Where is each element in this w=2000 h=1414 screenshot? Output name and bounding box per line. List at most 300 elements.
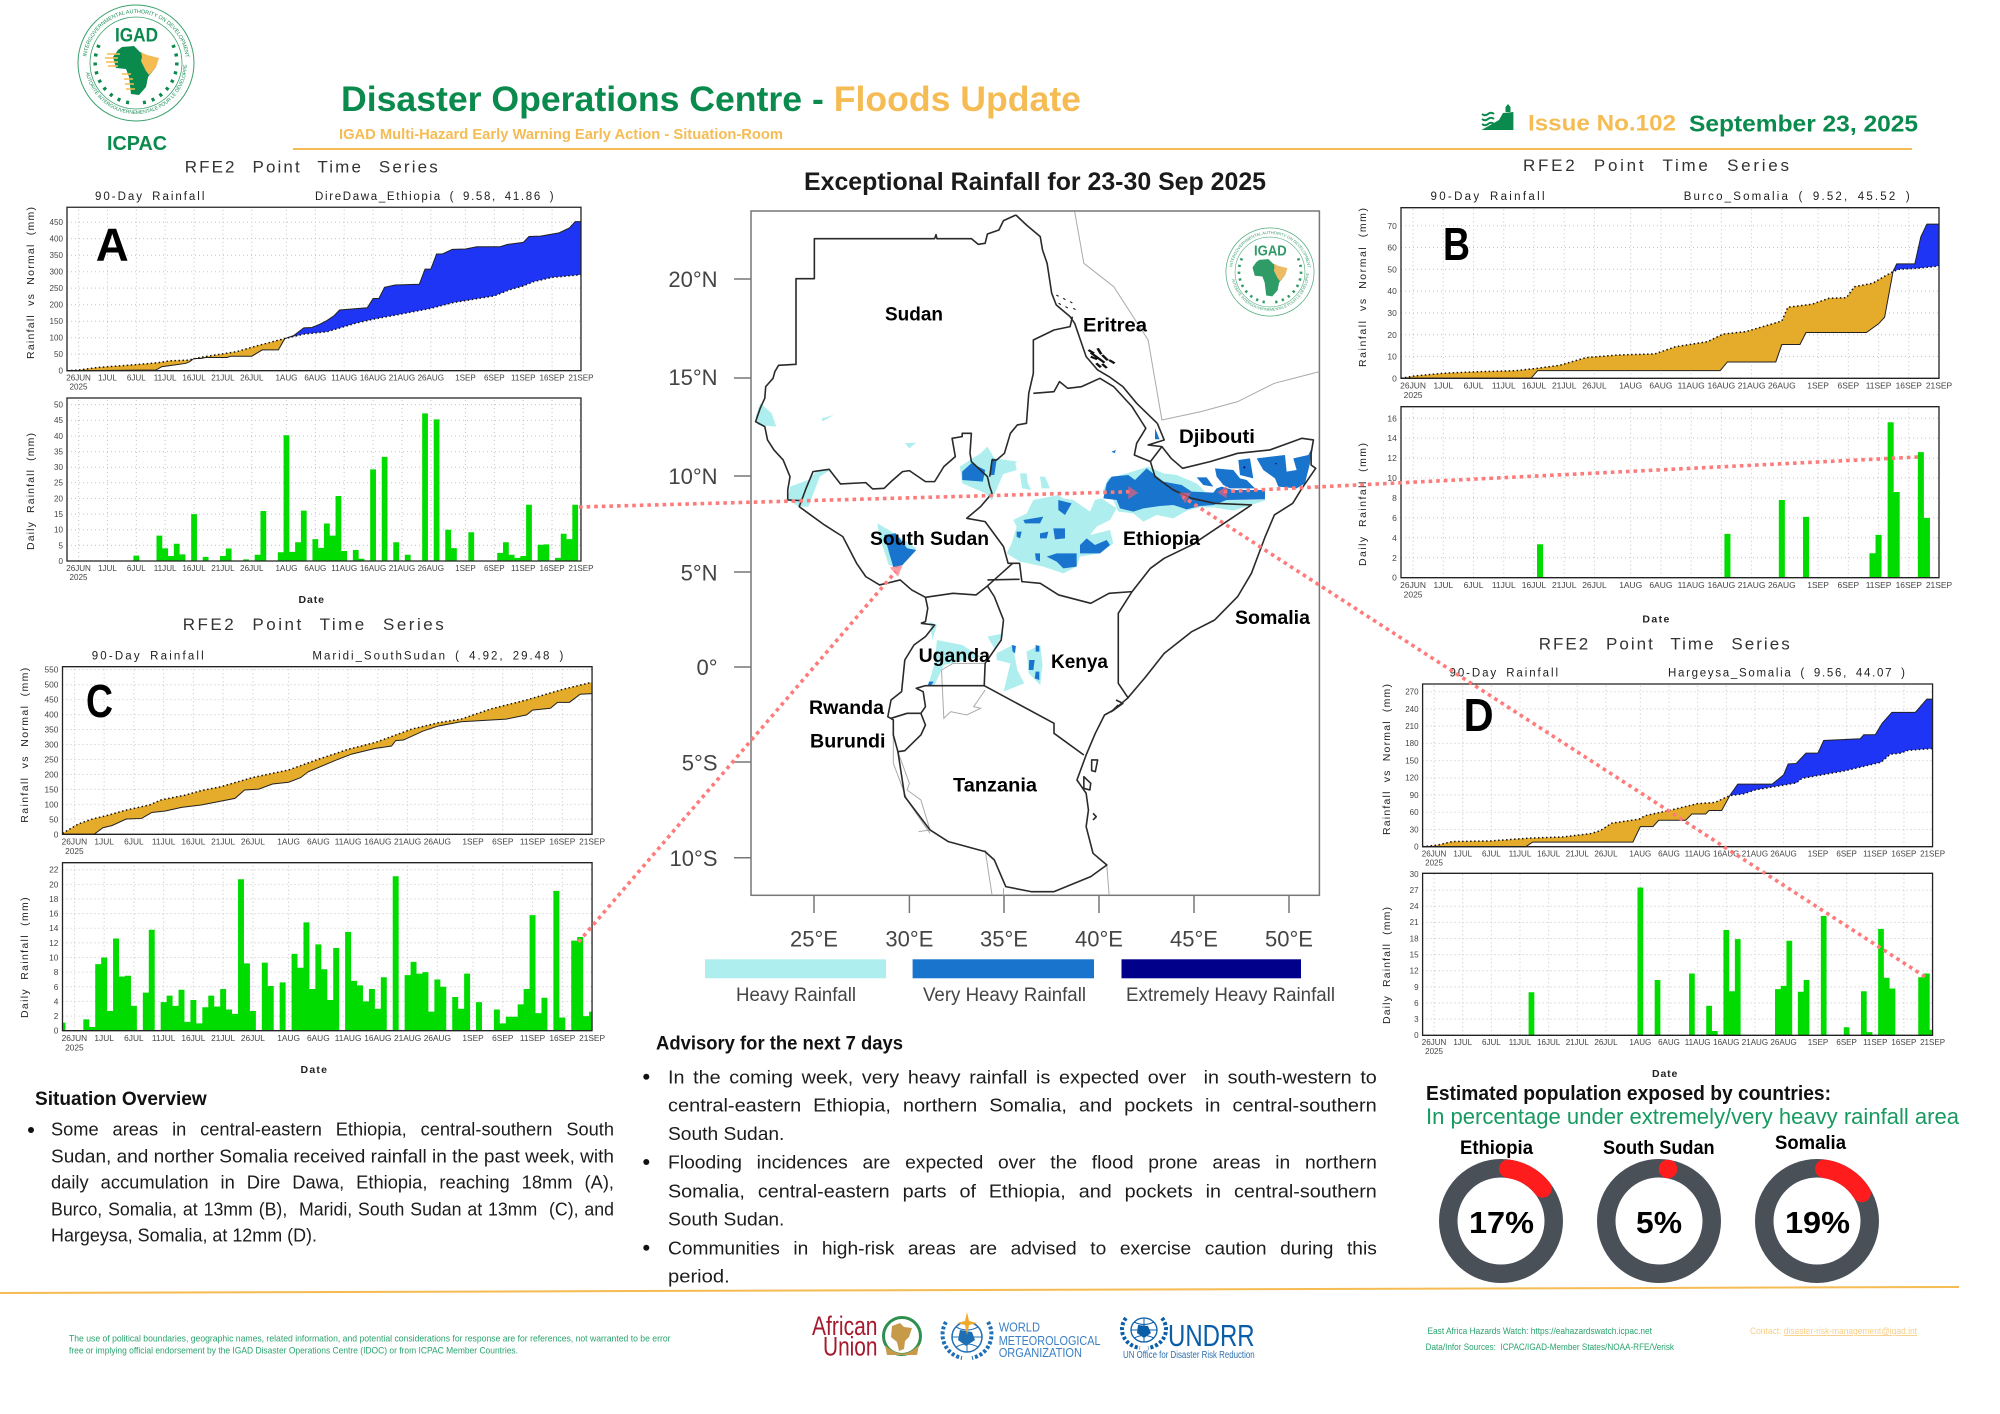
bar chart: daily rainfall: 26JUN bbox=[66, 564, 91, 573]
bar chart: daily rainfall: 6 bbox=[1392, 513, 1397, 523]
donut: South Sudan 5% bbox=[1603, 1137, 1715, 1274]
bar chart: daily rainfall: 4 bbox=[54, 996, 59, 1006]
bar chart: daily rainfall: 1AUG bbox=[277, 1033, 300, 1043]
area chart: rainfall vs normal: 16AUG bbox=[364, 836, 392, 846]
area chart: rainfall vs normal: 26JUL bbox=[1594, 849, 1618, 858]
area chart: rainfall vs normal: 6SEP bbox=[484, 374, 505, 383]
bar chart: daily rainfall: 12 bbox=[49, 938, 59, 948]
bar chart: daily rainfall: 21SEP bbox=[1920, 1038, 1945, 1047]
area chart: rainfall vs normal: 26JUN bbox=[62, 836, 87, 846]
bar chart: daily rainfall bbox=[54, 398, 594, 582]
bar chart: daily rainfall: 1SEP bbox=[455, 564, 476, 573]
bar chart: daily rainfall: 16AUG bbox=[360, 564, 386, 573]
area chart: rainfall vs normal: 11AUG bbox=[1685, 849, 1710, 858]
area chart: rainfall vs normal: 21JUL bbox=[1552, 381, 1577, 391]
disclaimer: The use of political boundaries, geographic names, related information, and potential considerations for response are for references, not warranted to be error bbox=[69, 1334, 670, 1344]
area chart: rainfall vs normal: 0 bbox=[1392, 373, 1397, 383]
chart title: RFE2 Point Time Series bbox=[185, 157, 438, 176]
area chart: rainfall vs normal: 1JUL bbox=[94, 836, 114, 846]
panel: chart A Dire Dawa bbox=[25, 157, 594, 606]
bar chart: daily rainfall: 16AUG bbox=[364, 1033, 392, 1043]
bar chart: daily rainfall: 21AUG bbox=[389, 564, 415, 573]
area chart: rainfall vs normal: 16AUG bbox=[360, 374, 386, 383]
bar chart: daily rainfall: 6AUG bbox=[1649, 580, 1672, 590]
bar chart: daily rainfall: 21JUL bbox=[1552, 580, 1577, 590]
bar chart: daily rainfall: 10 bbox=[1387, 473, 1397, 483]
axis label: Daily Rainfall (mm) bbox=[19, 897, 31, 1018]
area chart: rainfall vs normal: 400 bbox=[44, 710, 59, 720]
axis label: Daily Rainfall (mm) bbox=[25, 433, 37, 550]
area chart: rainfall vs normal: 26AUG bbox=[418, 374, 444, 383]
area chart: rainfall vs normal: 16SEP bbox=[1891, 849, 1916, 858]
area chart: rainfall vs normal: 1AUG bbox=[1619, 381, 1642, 391]
area chart: rainfall vs normal: 16JUL bbox=[181, 836, 206, 846]
bullet bbox=[28, 1127, 34, 1133]
bar chart: daily rainfall: 26AUG bbox=[1770, 1038, 1797, 1047]
area chart: rainfall vs normal: 2025 bbox=[1404, 390, 1423, 400]
date: September 23, 2025 bbox=[1689, 111, 1918, 137]
panel letter B: B bbox=[1443, 218, 1470, 270]
area chart: rainfall vs normal: 100 bbox=[44, 799, 59, 809]
area chart: rainfall vs normal: 2025 bbox=[65, 846, 84, 856]
bar chart: daily rainfall: 10 bbox=[49, 952, 59, 962]
bar chart: daily rainfall: 2 bbox=[54, 1011, 59, 1021]
bar chart: daily rainfall: 21AUG bbox=[394, 1033, 421, 1043]
bar chart: daily rainfall: 11AUG bbox=[1685, 1038, 1710, 1047]
body text: daily accumulation in Dire Dawa, Ethiopia, reaching 18mm (A), bbox=[51, 1172, 614, 1193]
legend: Extremely Heavy Rainfall bbox=[1126, 985, 1335, 1006]
area chart: rainfall vs normal: 30 bbox=[1387, 308, 1397, 318]
bar chart: daily rainfall: 20 bbox=[49, 879, 59, 889]
area chart: rainfall vs normal: 120 bbox=[1405, 774, 1419, 783]
area chart: rainfall vs normal: 240 bbox=[1405, 705, 1419, 714]
area chart: rainfall vs normal: 21SEP bbox=[1920, 849, 1945, 858]
logo: UNDRR bbox=[1122, 1318, 1255, 1361]
bar chart: daily rainfall: 11JUL bbox=[154, 564, 177, 573]
area chart: rainfall vs normal: 26JUL bbox=[240, 374, 264, 383]
text block: situation overview bbox=[28, 1089, 614, 1246]
longitude labels: 50°E bbox=[1265, 927, 1313, 952]
map logo: IGAD seal: INTERGOVERNMENTAL AUTHORITY ON DEVELOPMENT bbox=[1230, 231, 1311, 268]
logo: IGAD ICPAC seal: INTERGOVERNMENTAL AUTHORITY ON DEVELOPMENT bbox=[82, 9, 190, 58]
area chart: rainfall vs normal: 450 bbox=[49, 218, 63, 227]
area chart: rainfall vs normal: 210 bbox=[1405, 722, 1419, 731]
heading: Situation Overview bbox=[35, 1089, 207, 1110]
chart title: RFE2 Point Time Series bbox=[1539, 634, 1790, 653]
chart subtitle left: 90-Day Rainfall bbox=[95, 191, 204, 203]
country labels: Rwanda bbox=[809, 697, 884, 719]
body text: South Sudan. bbox=[668, 1208, 784, 1229]
logo caption: ICPAC: ICPAC bbox=[107, 133, 167, 155]
bar chart: daily rainfall: 30 bbox=[54, 463, 63, 472]
bar chart: daily rainfall: 6SEP bbox=[484, 564, 505, 573]
bar chart: daily rainfall: 11SEP bbox=[511, 564, 536, 573]
bar chart: daily rainfall: 1JUL bbox=[1433, 580, 1453, 590]
map title: Exceptional Rainfall for 23-30 Sep 2025 bbox=[804, 168, 1266, 196]
bar chart: daily rainfall: 11SEP bbox=[1863, 1038, 1887, 1047]
bar chart: daily rainfall: 1SEP bbox=[1808, 1038, 1828, 1047]
area chart: rainfall vs normal: 30 bbox=[1410, 825, 1419, 834]
area chart: rainfall vs normal: 100 bbox=[49, 334, 63, 343]
bar chart: daily rainfall: 1AUG bbox=[275, 564, 297, 573]
area chart: rainfall vs normal: 250 bbox=[44, 754, 59, 764]
area chart: rainfall vs normal: 16AUG bbox=[1708, 381, 1735, 391]
bar chart: daily rainfall: 50 bbox=[54, 401, 63, 410]
bar chart: daily rainfall: 6JUL bbox=[1482, 1038, 1501, 1047]
area chart: rainfall vs normal: 11AUG bbox=[331, 374, 357, 383]
logo: WMO: WORLD bbox=[999, 1320, 1040, 1335]
logo: African Union: African bbox=[812, 1311, 878, 1341]
area chart: rainfall vs normal: 21SEP bbox=[579, 836, 605, 846]
longitude labels: 25°E bbox=[790, 927, 838, 952]
area chart: rainfall vs normal: 150 bbox=[44, 784, 59, 794]
country labels: Sudan bbox=[885, 304, 943, 326]
area chart: rainfall vs normal: 11JUL bbox=[154, 374, 177, 383]
area chart: rainfall vs normal: 200 bbox=[44, 769, 59, 779]
bar chart: daily rainfall: 1SEP bbox=[462, 1033, 484, 1043]
area chart: rainfall vs normal: 1AUG bbox=[277, 836, 300, 846]
bar chart: daily rainfall: 18 bbox=[1410, 934, 1419, 943]
bar chart: daily rainfall: 1AUG bbox=[1619, 580, 1642, 590]
axis label: Daily Rainfall (mm) bbox=[1381, 907, 1393, 1024]
bar chart: daily rainfall: 21SEP bbox=[1926, 580, 1953, 590]
body text: Communities in high-risk areas are advised to exercise caution during this bbox=[668, 1237, 1377, 1258]
area chart: rainfall vs normal: 16JUL bbox=[1537, 849, 1561, 858]
donut: Somalia 19%: 19% bbox=[1785, 1205, 1850, 1240]
area chart: rainfall vs normal: 16AUG bbox=[1713, 849, 1739, 858]
map frame and axis ticks bbox=[734, 211, 1319, 913]
bar chart: daily rainfall: 26JUL bbox=[1594, 1038, 1618, 1047]
area chart: rainfall vs normal: 26JUL bbox=[241, 836, 265, 846]
bar chart: daily rainfall: 6AUG bbox=[307, 1033, 330, 1043]
bar chart: daily rainfall: 16AUG bbox=[1708, 580, 1735, 590]
area chart: rainfall vs normal: 450 bbox=[44, 695, 59, 705]
area chart: rainfall vs normal: 60 bbox=[1387, 243, 1397, 253]
logo: African Union bbox=[812, 1311, 920, 1362]
logo: WMO: ORGANIZATION bbox=[999, 1345, 1082, 1360]
area chart: rainfall vs normal: 270 bbox=[1405, 688, 1419, 697]
body text: Somalia, central-eastern parts of Ethiopia, and pockets in central-southern bbox=[668, 1180, 1377, 1201]
area chart: rainfall vs normal: 0 bbox=[54, 829, 59, 839]
bar chart: daily rainfall: 9 bbox=[1414, 983, 1419, 992]
map logo: IGAD seal: IGAD bbox=[1254, 244, 1287, 260]
bar chart: daily rainfall: 10 bbox=[54, 526, 63, 535]
axis label: Rainfall vs Normal (mm) bbox=[1357, 208, 1369, 367]
bar chart: daily rainfall: 6JUL bbox=[124, 1033, 144, 1043]
bar chart: daily rainfall: 0 bbox=[1414, 1031, 1419, 1040]
area chart: rainfall vs normal: 250 bbox=[49, 284, 63, 293]
text block: advisory bbox=[643, 1033, 1377, 1286]
heading: Advisory for the next 7 days bbox=[656, 1033, 903, 1054]
panel: exceptional rainfall map bbox=[668, 168, 1335, 1006]
area chart: rainfall vs normal: 0 bbox=[58, 367, 63, 376]
footer links: Contact: disaster-risk-management@igad.int bbox=[1750, 1326, 1917, 1336]
bar chart: daily rainfall: 16 bbox=[49, 909, 59, 919]
bar chart: daily rainfall: 15 bbox=[54, 510, 63, 519]
bar chart: daily rainfall: 12 bbox=[1387, 453, 1397, 463]
chart subtitle left: 90-Day Rainfall bbox=[1450, 668, 1558, 680]
longitude labels: 30°E bbox=[885, 927, 933, 952]
bar chart: daily rainfall bbox=[1387, 407, 1953, 600]
donut: Ethiopia 17%: 17% bbox=[1469, 1205, 1534, 1240]
bar chart: daily rainfall: 11SEP bbox=[520, 1033, 546, 1043]
bar chart: daily rainfall: 26JUN bbox=[1400, 580, 1426, 590]
area chart: rainfall vs normal: 26AUG bbox=[1768, 381, 1796, 391]
bar chart: daily rainfall: 16SEP bbox=[1891, 1038, 1916, 1047]
arrow: dotted connector B bbox=[1222, 457, 1918, 492]
bar chart: daily rainfall: 8 bbox=[1392, 493, 1397, 503]
chart subtitle left: 90-Day Rainfall bbox=[1430, 191, 1544, 203]
bar chart: daily rainfall: 26JUN bbox=[62, 1033, 87, 1043]
bar chart: daily rainfall: 11AUG bbox=[1678, 580, 1705, 590]
bar chart: daily rainfall: 12 bbox=[1410, 967, 1419, 976]
longitude labels: 45°E bbox=[1170, 927, 1218, 952]
area chart: rainfall vs normal: 21SEP bbox=[568, 374, 594, 383]
bar chart: daily rainfall: 26JUL bbox=[1582, 580, 1607, 590]
axis label: date: Date bbox=[300, 1064, 327, 1076]
bar chart: daily rainfall: 26AUG bbox=[424, 1033, 451, 1043]
bar chart: daily rainfall: 21JUL bbox=[1566, 1038, 1589, 1047]
latitude labels: 10°N bbox=[668, 464, 718, 489]
area chart: rainfall vs normal: 50 bbox=[54, 350, 63, 359]
bar chart: daily rainfall: 6SEP bbox=[1838, 580, 1859, 590]
latitude labels: 0° bbox=[696, 655, 718, 680]
bar chart: daily rainfall: 35 bbox=[54, 447, 63, 456]
bar chart: daily rainfall: 26JUL bbox=[240, 564, 264, 573]
bar chart: daily rainfall: 11JUL bbox=[152, 1033, 176, 1043]
subheading: In percentage under extremely/very heavy rainfall area bbox=[1426, 1104, 1960, 1129]
country labels: Djibouti bbox=[1179, 426, 1255, 448]
bar chart: daily rainfall: 40 bbox=[54, 432, 63, 441]
footer links: East Africa Hazards Watch: https://eahazardswatch.icpac.net bbox=[1428, 1326, 1652, 1336]
area chart: rainfall vs normal: 21JUL bbox=[211, 836, 236, 846]
area chart: rainfall vs normal: 26JUN bbox=[1422, 849, 1447, 858]
area chart: rainfall vs normal: 21SEP bbox=[1926, 381, 1953, 391]
bar chart: daily rainfall: 5 bbox=[58, 541, 63, 550]
area chart: rainfall vs normal: 20 bbox=[1387, 330, 1397, 340]
area chart: rainfall vs normal: 2025 bbox=[70, 383, 88, 392]
panel: chart C Maridi bbox=[19, 615, 605, 1076]
boundaries: northern countries bbox=[756, 212, 1319, 623]
area chart: rainfall vs normal: 90 bbox=[1410, 791, 1419, 800]
legend bbox=[705, 959, 1335, 1006]
bar chart: daily rainfall: 26JUL bbox=[241, 1033, 265, 1043]
bar chart: daily rainfall: 22 bbox=[49, 865, 59, 875]
area chart: rainfall vs normal: 26JUN bbox=[1400, 381, 1426, 391]
latitude labels: 5°N bbox=[681, 561, 718, 586]
body text bbox=[668, 1066, 1377, 1286]
latitude labels: 10°S bbox=[670, 846, 718, 871]
bar chart: daily rainfall: 2025 bbox=[1404, 590, 1423, 600]
bar chart: daily rainfall: 6AUG bbox=[1658, 1038, 1680, 1047]
area chart: rainfall vs normal: 40 bbox=[1387, 286, 1397, 296]
bar chart: daily rainfall: 4 bbox=[1392, 533, 1397, 543]
donut: Somalia 19%: Somalia bbox=[1775, 1132, 1846, 1154]
area chart: rainfall vs normal: 11SEP bbox=[1863, 849, 1887, 858]
panel letter A: A bbox=[96, 219, 129, 271]
bar chart: daily rainfall: 6JUL bbox=[1464, 580, 1484, 590]
country labels: Uganda bbox=[919, 645, 990, 667]
bar chart: daily rainfall: 11JUL bbox=[1509, 1038, 1532, 1047]
donut: Ethiopia 17%: Ethiopia bbox=[1460, 1137, 1533, 1159]
header rule bbox=[293, 148, 1912, 150]
axis label: date: Date bbox=[298, 594, 324, 606]
bar chart: daily rainfall: 21SEP bbox=[579, 1033, 605, 1043]
body text bbox=[51, 1119, 614, 1246]
bar chart: daily rainfall: 0 bbox=[1392, 573, 1397, 583]
bar chart: daily rainfall: 11SEP bbox=[1866, 580, 1892, 590]
footer links: Data/Infor Sources: ICPAC/IGAD-Member States/NOAA-RFE/Verisk bbox=[1426, 1342, 1674, 1352]
area chart: rainfall vs normal: 300 bbox=[49, 268, 63, 277]
bar chart: daily rainfall: 15 bbox=[1410, 950, 1419, 959]
area chart: rainfall vs normal: 11SEP bbox=[1866, 381, 1892, 391]
legend: Heavy Rainfall bbox=[736, 985, 856, 1006]
axis label: Rainfall vs Normal (mm) bbox=[1381, 684, 1393, 835]
legend: Very Heavy Rainfall bbox=[923, 985, 1086, 1006]
body text: Hargeysa, Somalia, at 12mm (D). bbox=[51, 1225, 317, 1246]
disclaimer bbox=[69, 1334, 670, 1356]
bar chart: daily rainfall: 27 bbox=[1410, 886, 1419, 895]
area chart: rainfall vs normal: 16JUL bbox=[1522, 381, 1547, 391]
bar chart: daily rainfall: 2025 bbox=[70, 573, 88, 582]
logo: IGAD ICPAC seal: AUTORITÉ INTERGOUVERNEMENTALE POUR LE DÉVELOPPEMENT bbox=[86, 64, 187, 114]
country labels: Burundi bbox=[810, 731, 886, 753]
area chart: rainfall vs normal: 1AUG bbox=[1629, 849, 1651, 858]
bar chart: daily rainfall: 26AUG bbox=[418, 564, 444, 573]
axis label: Rainfall vs Normal (mm) bbox=[19, 668, 31, 823]
map logo: IGAD seal: AUTORITÉ INTERGOUVERNEMENTALE POUR LE DÉVELOPPEMENT bbox=[1232, 273, 1309, 311]
country labels: Ethiopia bbox=[1123, 528, 1200, 550]
issue number: Issue No.102 bbox=[1528, 111, 1676, 136]
bar chart: daily rainfall: 6JUL bbox=[127, 564, 146, 573]
area chart: rainfall vs normal: 16SEP bbox=[1896, 381, 1922, 391]
bar chart: daily rainfall: 6 bbox=[54, 982, 59, 992]
latitude labels bbox=[668, 267, 718, 871]
chart title: RFE2 Point Time Series bbox=[1523, 156, 1789, 175]
bar chart: daily rainfall: 0 bbox=[58, 557, 63, 566]
area chart: rainfall vs normal: 180 bbox=[1405, 739, 1419, 748]
bar chart: daily rainfall: 16 bbox=[1387, 413, 1397, 423]
area chart: rainfall vs normal: 21JUL bbox=[211, 374, 235, 383]
bar chart: daily rainfall: 21JUL bbox=[211, 1033, 236, 1043]
bar chart: daily rainfall: 2 bbox=[1392, 553, 1397, 563]
bar chart: daily rainfall: 6AUG bbox=[304, 564, 326, 573]
area chart: rainfall vs normal: 1JUL bbox=[1453, 849, 1473, 858]
latitude labels: 5°S bbox=[682, 751, 718, 776]
disclaimer: free or implying official endorsement by the IGAD Disaster Operations Centre (IDOC) or from ICPAC Member Countries. bbox=[69, 1346, 518, 1356]
panel letter D: D bbox=[1464, 689, 1494, 741]
area chart: rainfall vs normal bbox=[44, 665, 605, 856]
footer rule bbox=[0, 1286, 1959, 1294]
panel: population exposed bbox=[1426, 1083, 1960, 1274]
area chart: rainfall vs normal: 200 bbox=[49, 301, 63, 310]
country labels: South Sudan bbox=[870, 528, 989, 550]
area chart: rainfall vs normal: 1SEP bbox=[455, 374, 476, 383]
heading: Estimated population exposed by countries: bbox=[1426, 1083, 1831, 1105]
area chart: rainfall vs normal: 500 bbox=[44, 680, 59, 690]
area chart: rainfall vs normal: 1SEP bbox=[1808, 849, 1828, 858]
body text: South Sudan. bbox=[668, 1123, 784, 1144]
logo: IGAD ICPAC seal: IGAD bbox=[115, 26, 158, 46]
area chart: rainfall vs normal: 11SEP bbox=[520, 836, 546, 846]
bar chart: daily rainfall: 2025 bbox=[65, 1042, 84, 1052]
header bbox=[78, 4, 1918, 155]
area chart: rainfall vs normal: 0 bbox=[1414, 843, 1419, 852]
bar chart: daily rainfall bbox=[1410, 870, 1945, 1056]
longitude labels: 35°E bbox=[980, 927, 1028, 952]
bar chart: daily rainfall: 8 bbox=[54, 967, 59, 977]
donut: South Sudan 5%: South Sudan bbox=[1603, 1137, 1715, 1159]
bar chart: daily rainfall: 21AUG bbox=[1738, 580, 1765, 590]
footer bbox=[0, 1286, 1959, 1362]
map logo: IGAD seal bbox=[1226, 228, 1314, 316]
area chart: rainfall vs normal: 11JUL bbox=[1492, 381, 1516, 391]
bar chart: daily rainfall: 24 bbox=[1410, 902, 1419, 911]
bar chart: daily rainfall: 16AUG bbox=[1713, 1038, 1739, 1047]
bar chart: daily rainfall: 1SEP bbox=[1807, 580, 1829, 590]
bar chart: daily rainfall: 26JUN bbox=[1422, 1038, 1447, 1047]
bar chart: daily rainfall: 1JUL bbox=[94, 1033, 114, 1043]
area chart: rainfall vs normal: 150 bbox=[1405, 756, 1419, 765]
area chart: rainfall vs normal: 26AUG bbox=[424, 836, 451, 846]
area chart: rainfall vs normal: 150 bbox=[49, 317, 63, 326]
icon: flood issue bbox=[1482, 104, 1513, 130]
bar chart: daily rainfall: 18 bbox=[49, 894, 59, 904]
area chart: rainfall vs normal: 6JUL bbox=[124, 836, 144, 846]
bar chart: daily rainfall: 14 bbox=[1387, 433, 1397, 443]
area chart: rainfall vs normal: 6SEP bbox=[492, 836, 514, 846]
area chart: rainfall vs normal: 26JUL bbox=[1582, 381, 1607, 391]
location markers bbox=[890, 486, 1227, 577]
logo: African Union: Union bbox=[823, 1332, 878, 1362]
footer links bbox=[1426, 1326, 1917, 1352]
area chart: rainfall vs normal: 350 bbox=[49, 251, 63, 260]
logo: WMO bbox=[943, 1312, 1100, 1360]
axis label: date: Date bbox=[1652, 1068, 1678, 1080]
area chart: rainfall vs normal: 6JUL bbox=[1464, 381, 1484, 391]
bar chart: daily rainfall: 6SEP bbox=[1836, 1038, 1857, 1047]
area chart: rainfall vs normal: 21AUG bbox=[1738, 381, 1765, 391]
bar chart: daily rainfall: 2025 bbox=[1425, 1047, 1444, 1056]
area chart: rainfall vs normal: 21JUL bbox=[1566, 849, 1589, 858]
area chart: rainfall vs normal bbox=[1387, 208, 1953, 400]
latitude labels: 15°N bbox=[668, 365, 718, 390]
bar chart: daily rainfall: 21AUG bbox=[1742, 1038, 1768, 1047]
logo: UNDRR: UN Office for Disaster Risk Reduction bbox=[1123, 1350, 1255, 1361]
area chart: rainfall vs normal: 6AUG bbox=[307, 836, 330, 846]
arrow: dotted connector D bbox=[1183, 497, 1925, 977]
bar chart: daily rainfall: 16JUL bbox=[182, 564, 206, 573]
bullets bbox=[643, 1074, 649, 1251]
area chart: rainfall vs normal: 26AUG bbox=[1770, 849, 1797, 858]
title: Disaster Operations Centre - Floods Update bbox=[341, 79, 1081, 119]
logo: WMO: METEOROLOGICAL bbox=[999, 1333, 1100, 1348]
area chart: rainfall vs normal: 11AUG bbox=[335, 836, 361, 846]
rainfall: Ethiopia and Somalia band bbox=[1000, 448, 1312, 573]
country labels: Kenya bbox=[1051, 651, 1108, 673]
body text: Sudan, and norther Somalia received rainfall in the past week, with bbox=[51, 1146, 614, 1167]
bar chart: daily rainfall: 14 bbox=[49, 923, 59, 933]
chart subtitle location: Maridi_SouthSudan ( 4.92, 29.48 ) bbox=[312, 650, 564, 662]
bar chart: daily rainfall: 21 bbox=[1410, 918, 1419, 927]
area chart: rainfall vs normal: 1SEP bbox=[462, 836, 484, 846]
country labels: Tanzania bbox=[953, 775, 1037, 797]
axis label: Rainfall vs Normal (mm) bbox=[25, 207, 37, 359]
area chart: rainfall vs normal: 6AUG bbox=[1649, 381, 1672, 391]
area chart: rainfall vs normal: 16SEP bbox=[540, 374, 565, 383]
bar chart: daily rainfall bbox=[49, 863, 605, 1052]
chart subtitle location: Burco_Somalia ( 9.52, 45.52 ) bbox=[1684, 191, 1910, 203]
